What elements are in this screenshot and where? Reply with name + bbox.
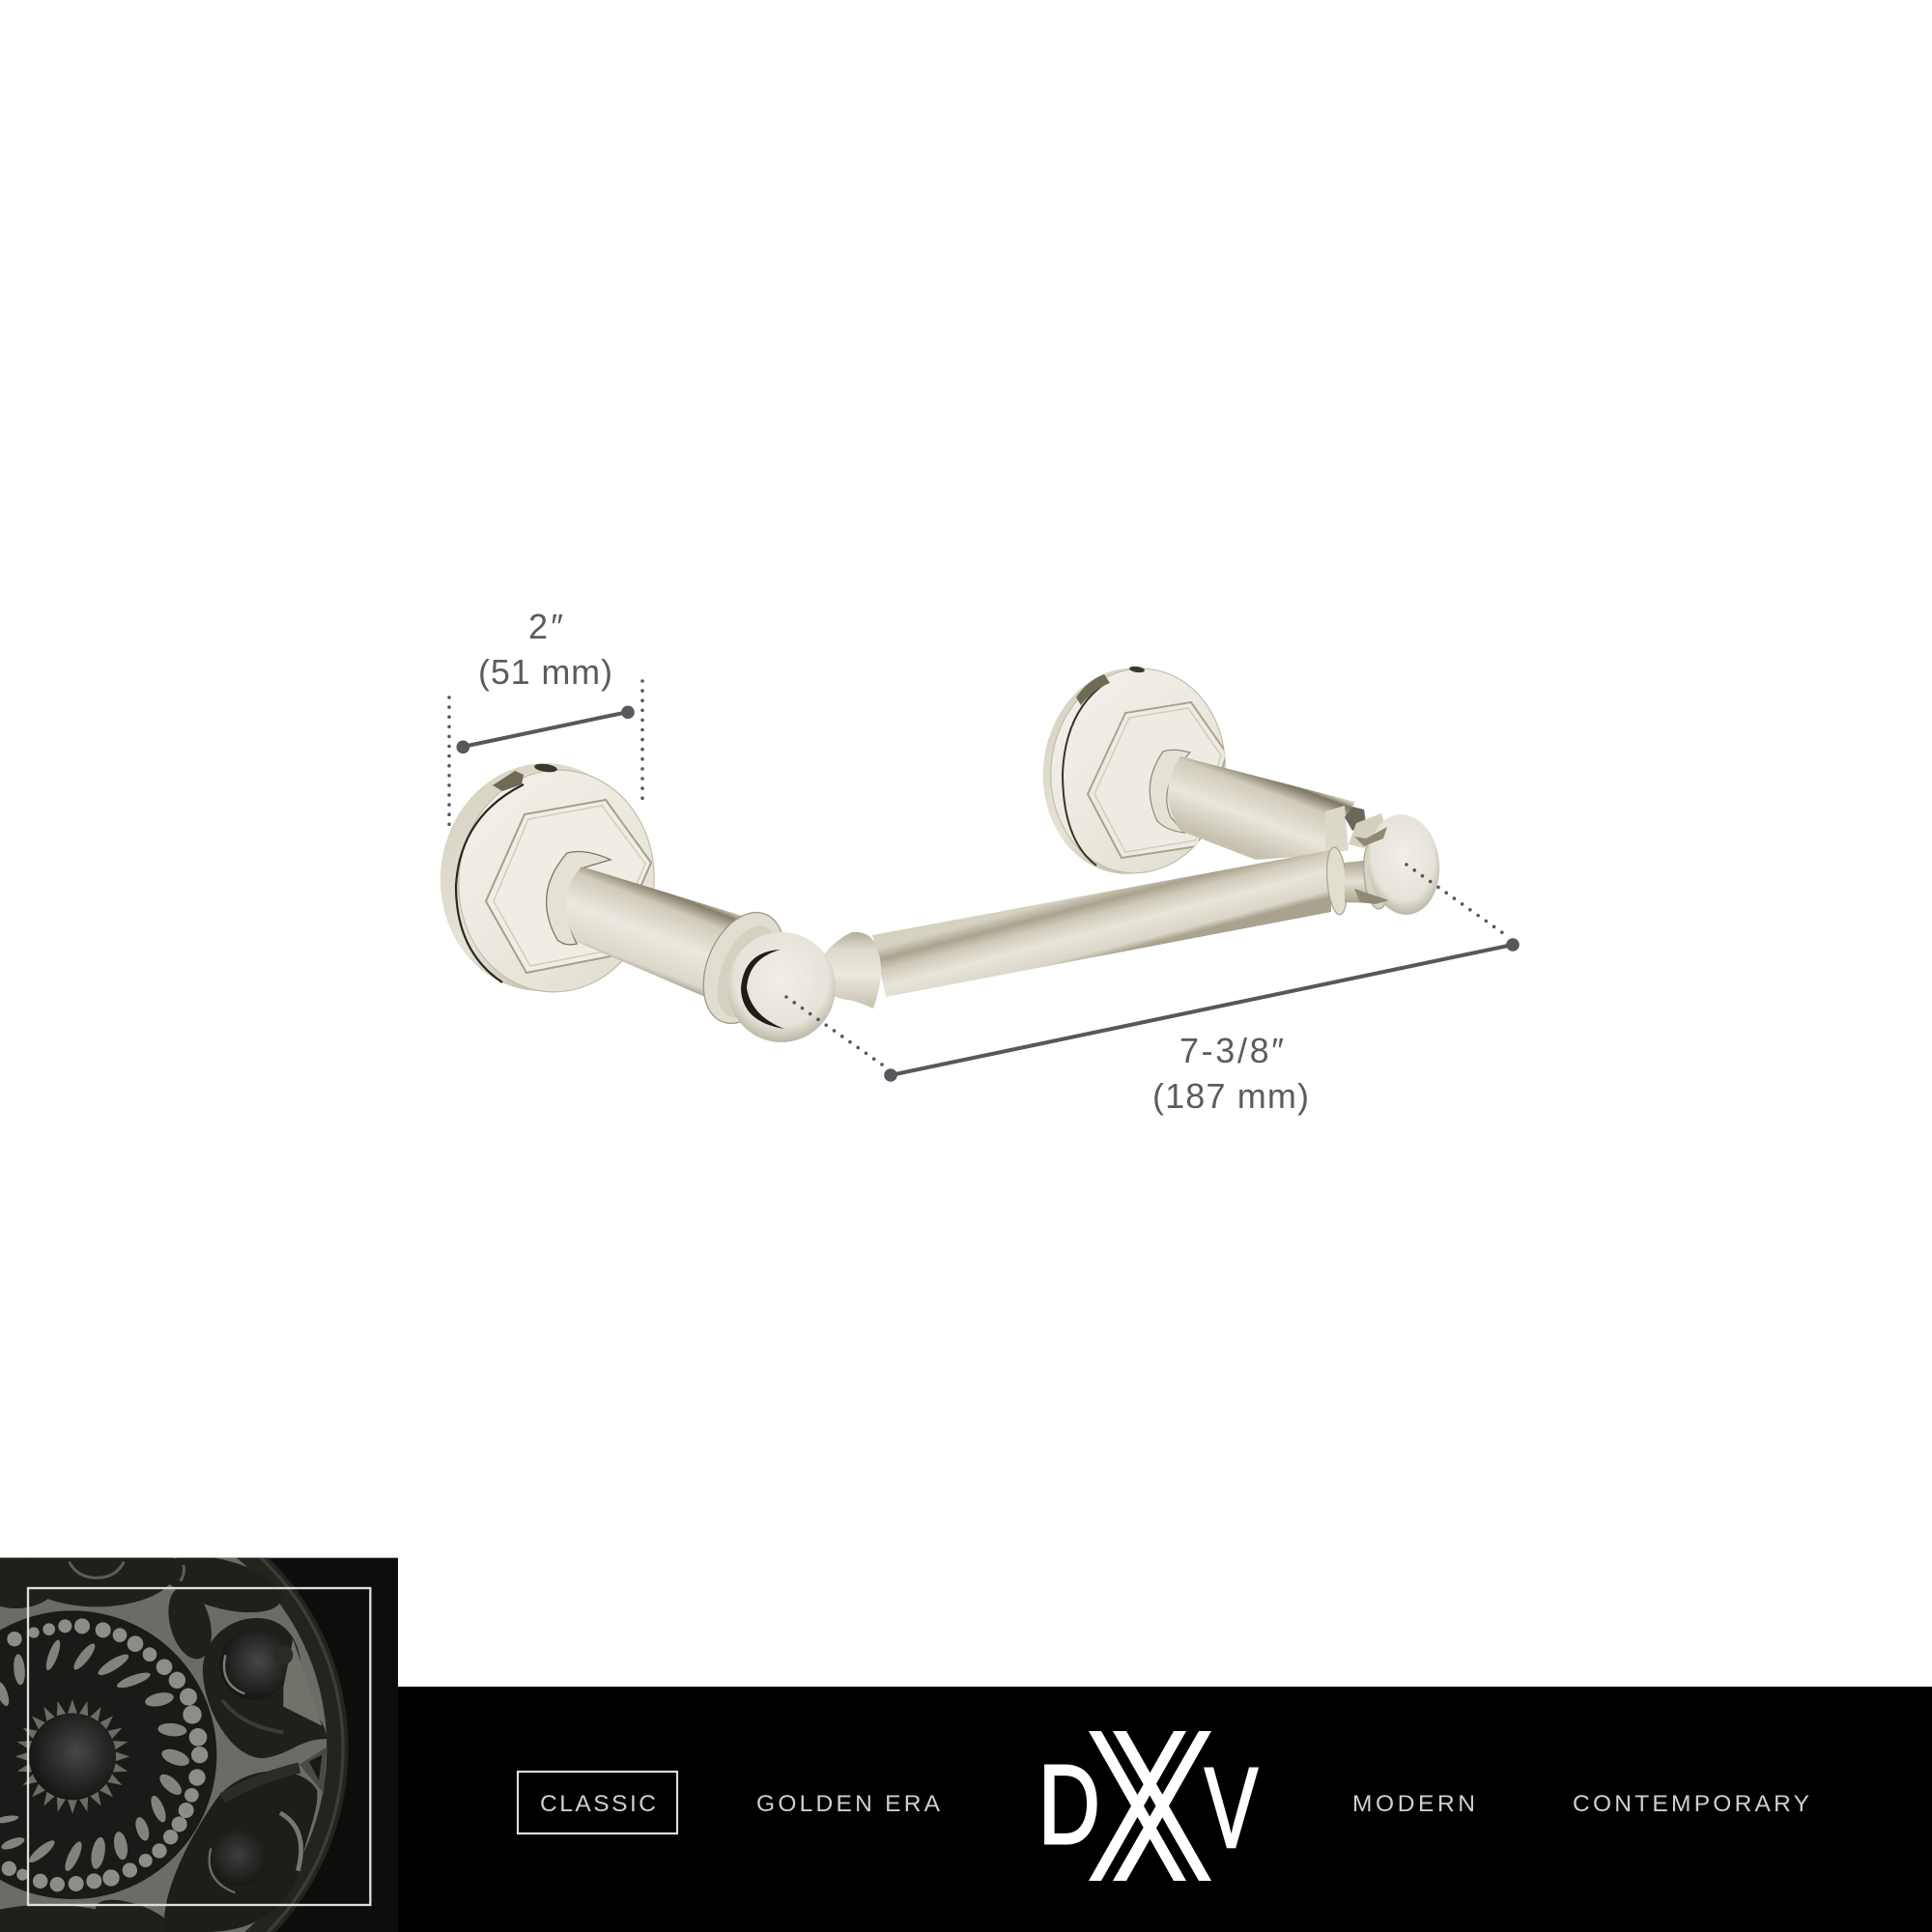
dark beaded band — [0, 1610, 216, 1899]
label: 2 inch: 2″ — [528, 607, 563, 646]
rear knob — [1354, 810, 1444, 919]
rear joint — [1325, 806, 1387, 854]
rear arm — [1150, 750, 1355, 860]
star rays around centre — [15, 1699, 129, 1814]
upper right scroll — [203, 1618, 327, 1758]
product: toilet paper holder — [429, 658, 1444, 1042]
style nav: GOLDEN ERA: GOLDEN ERA — [756, 1791, 941, 1817]
bar end cap — [824, 932, 881, 1009]
medallion disk — [0, 1557, 348, 1932]
bar neck — [1345, 860, 1372, 903]
logo letter V: V — [1205, 1744, 1258, 1871]
style nav: MODERN: MODERN — [1352, 1791, 1475, 1817]
front arm — [547, 852, 749, 997]
panel: ornate medallion photo — [0, 1557, 398, 1932]
dimension: 7-3/8 inch length — [786, 865, 1520, 1082]
label: 7-3/8 inch: 7-3/8″ — [1179, 1031, 1284, 1070]
front knob — [688, 900, 836, 1042]
front wall plate — [429, 753, 665, 1002]
horizontal roller bar — [824, 846, 1372, 1009]
rear wall plate — [1043, 667, 1226, 874]
measure line — [456, 705, 635, 753]
measure line — [884, 938, 1520, 1082]
style nav: CONTEMPORARY: CONTEMPORARY — [1573, 1791, 1809, 1817]
style nav: CLASSIC (selected): CLASSIC — [540, 1791, 656, 1817]
label: 51 mm: (51 mm) — [478, 652, 612, 692]
infographic canvas — [0, 614, 1932, 1932]
bar end ring — [1324, 846, 1350, 916]
bead ring — [2, 1618, 208, 1891]
top and edge scrolls — [0, 1529, 288, 1932]
logo crossed X strands — [1089, 1731, 1211, 1881]
central boss — [29, 1713, 116, 1800]
style nav: CLASSIC (selected) — [518, 1772, 677, 1833]
DXV logo — [1038, 1731, 1258, 1881]
white inset frame — [28, 1588, 370, 1905]
dotted extension lines — [449, 681, 642, 825]
petals around centre — [0, 1638, 191, 1873]
footer black band — [398, 1687, 1932, 1932]
lower right scroll — [164, 1747, 327, 1932]
dimension: 2 inch width — [449, 607, 642, 825]
logo letter D: D — [1038, 1742, 1100, 1867]
top scroll highlight — [70, 1562, 184, 1581]
dotted extension lines — [786, 865, 1503, 1065]
label: 187 mm: (187 mm) — [1152, 1076, 1309, 1116]
